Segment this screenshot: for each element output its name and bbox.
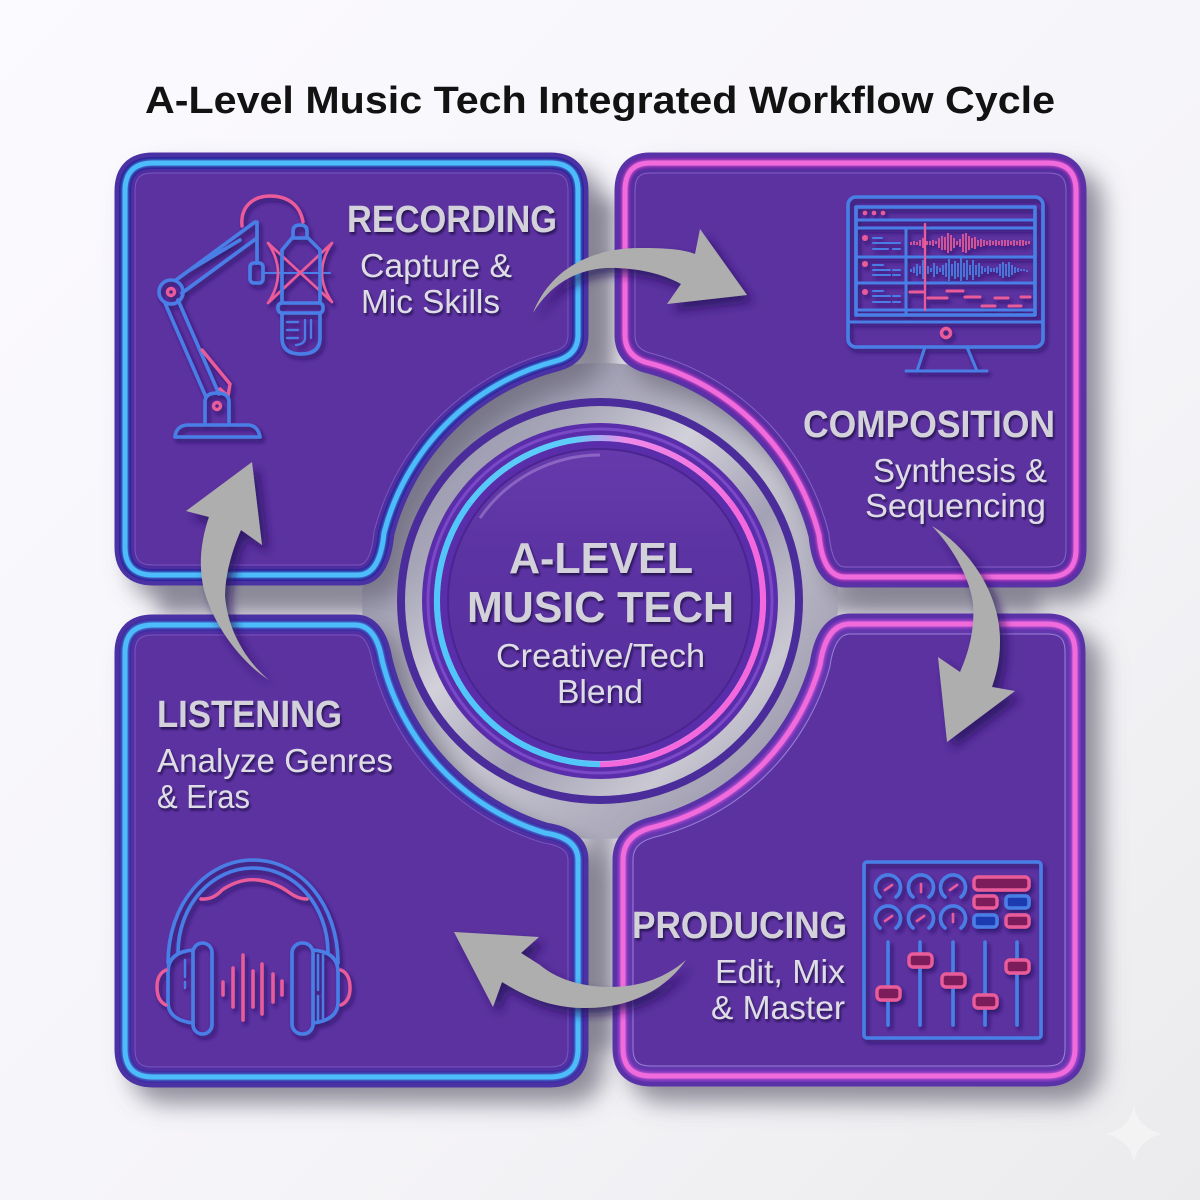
arrow: listening to recording	[186, 462, 269, 680]
arrow: composition to producing	[932, 526, 1015, 742]
arrow: recording to composition	[533, 229, 747, 313]
text: recording: RECORDING	[347, 199, 557, 241]
text: composition	[803, 404, 1055, 524]
text: composition: Synthesis &	[873, 452, 1047, 489]
text: composition: Sequencing	[865, 487, 1046, 524]
icon: DAW monitor	[848, 197, 1043, 371]
centre hub	[397, 398, 803, 804]
text: listening: Analyze Genres	[157, 742, 393, 779]
panel: recording	[125, 163, 578, 575]
icon: microphone on boom arm	[159, 196, 332, 437]
icon: sparkle watermark	[1106, 1106, 1162, 1162]
text: producing	[632, 905, 847, 1026]
text: listening	[157, 694, 393, 815]
text: centre hub: Blend	[557, 673, 643, 710]
text: centre hub: MUSIC TECH	[467, 583, 734, 632]
text: listening: LISTENING	[157, 694, 342, 736]
panel: listening	[125, 625, 578, 1077]
text: producing: Edit, Mix	[715, 953, 846, 990]
centre backing and channels	[160, 200, 1040, 1050]
text: recording	[347, 199, 557, 320]
text: recording: Capture &	[360, 247, 512, 284]
text: centre hub	[467, 534, 734, 710]
panel: producing	[623, 624, 1075, 1076]
panel: composition	[625, 163, 1076, 577]
text: recording: Mic Skills	[361, 283, 500, 320]
text: listening: & Eras	[157, 778, 250, 815]
text: producing: PRODUCING	[632, 905, 847, 947]
text: centre hub: Creative/Tech	[496, 637, 705, 674]
title: A-Level Music Tech Integrated Workflow Cycle	[145, 80, 1055, 122]
text: composition: COMPOSITION	[803, 404, 1055, 446]
arrow: producing to listening	[454, 932, 686, 1008]
icon: headphones	[157, 860, 350, 1034]
text: producing: & Master	[711, 989, 845, 1026]
icon: mixing console	[864, 862, 1041, 1038]
text: centre hub: A-LEVEL	[509, 534, 693, 583]
